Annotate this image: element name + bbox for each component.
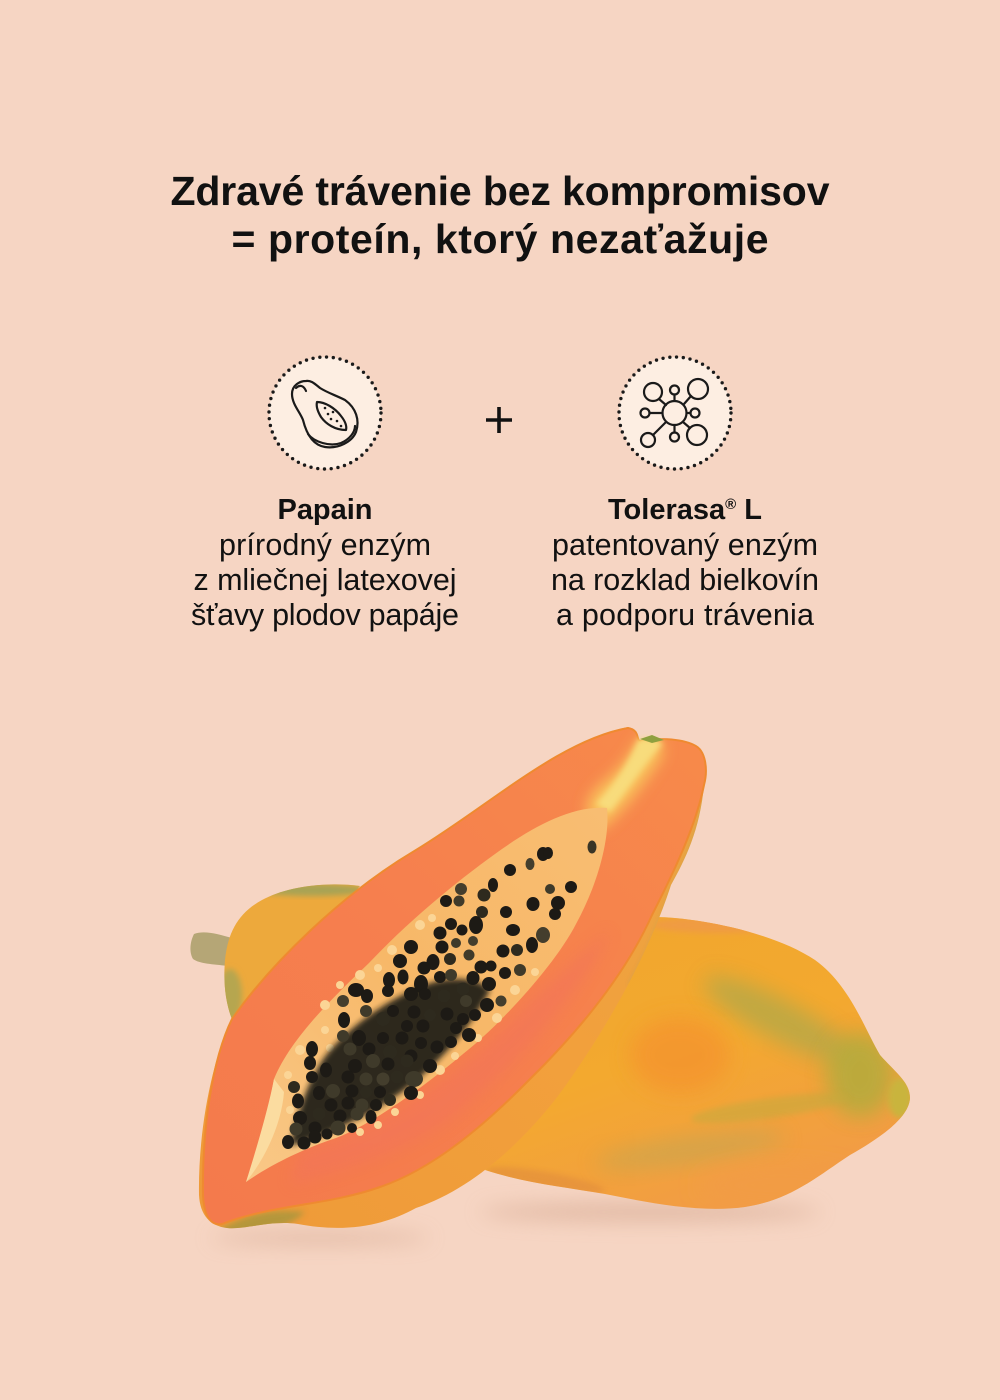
icon: enzyme molecule in dotted circle [619,357,731,469]
text block: Tolerasa L: ® [725,496,736,513]
seed cavity [246,808,608,1182]
icon: papaya in dotted circle [269,357,381,469]
title: = proteín, ktorý nezaťažuje [232,216,768,262]
cut papaya skin [199,727,706,1228]
skin greenish edge [215,790,712,1233]
papaya illustration [190,727,920,1244]
back papaya [224,884,360,1018]
text block: Papain: šťavy plodov papáje [191,598,459,632]
text block: Tolerasa L [551,494,819,632]
text block: Tolerasa L: patentovaný enzým [552,528,818,562]
text block: Tolerasa L: a podporu trávenia [556,598,814,632]
whole papaya [480,910,920,1215]
title [170,168,830,262]
text block: Papain: prírodný enzým [219,528,431,562]
text block: Papain [191,494,459,632]
title: Zdravé trávenie bez kompromisov [170,168,830,214]
text block: Papain: z mliečnej latexovej [194,563,456,597]
cut papaya flesh [203,728,706,1224]
text block: Tolerasa L: na rozklad bielkovín [551,563,819,597]
plus sign [486,407,512,433]
text block: Papain: Papain [278,494,372,526]
flesh tone variation and stem glow [290,738,663,1185]
dense seed mass [290,979,490,1146]
papaya seeds [282,840,596,1150]
text block: Tolerasa L: L [736,494,762,526]
back papaya stem [190,932,232,966]
stem core highlight [596,738,663,812]
text block: Tolerasa L: Tolerasa [608,494,725,526]
pulp bumps [284,914,539,1136]
shadow under fruit [210,1203,820,1244]
